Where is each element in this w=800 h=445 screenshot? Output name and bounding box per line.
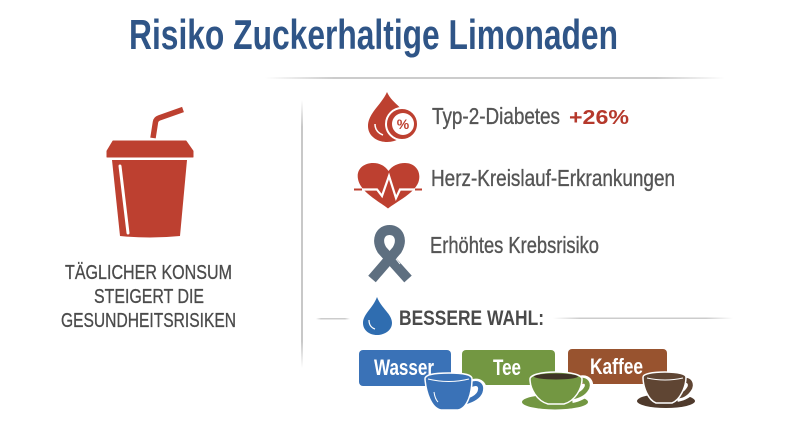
button: Tee: Tee (493, 355, 521, 380)
label: diabetes: Typ-2-Diabetes (432, 103, 560, 129)
button: Wasser: Wasser (374, 355, 434, 380)
button: Tee (462, 350, 555, 385)
heading: better choice: BESSERE WAHL: (399, 307, 544, 330)
icon: green cup (522, 372, 589, 410)
left caption: STEIGERT DIE (94, 286, 204, 308)
icon: blood drop with percent (368, 92, 418, 142)
icon: soda cup (107, 110, 193, 238)
icon: awareness ribbon (372, 230, 408, 279)
icon: water drop (363, 297, 392, 335)
icon: blood drop with percent: % (397, 116, 410, 132)
icon: blue cup (425, 373, 482, 410)
left caption: GESUNDHEITSRISIKEN (61, 310, 236, 332)
title: Risiko Zuckerhaltige Limonaden (129, 11, 618, 58)
icon: heart with pulse (354, 163, 422, 208)
section divider left (316, 318, 350, 320)
icon: brown cup (637, 372, 695, 408)
label: cancer: Erhöhtes Krebsrisiko (430, 232, 599, 258)
left caption: TÄGLICHER KONSUM (65, 262, 232, 284)
button: Wasser (359, 350, 451, 386)
button: Kaffee: Kaffee (590, 354, 643, 379)
left caption (61, 262, 236, 332)
stat: plus 26 percent: +26% (569, 107, 629, 129)
button: Kaffee (568, 349, 667, 384)
label: cardiovascular: Herz-Kreislauf-Erkrankungen (431, 165, 675, 191)
